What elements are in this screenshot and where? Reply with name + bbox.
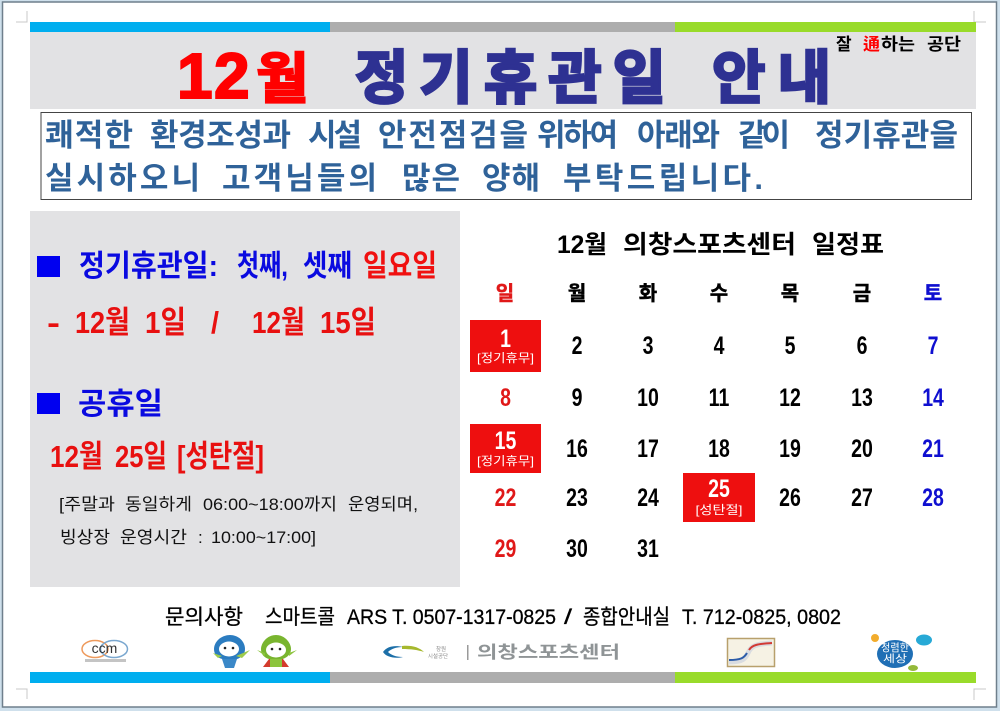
- week 5 dates: 31: [637, 535, 659, 563]
- notice line 1: 환경조성과: [150, 118, 291, 153]
- logo: blue city badge: [871, 634, 932, 671]
- holiday: 25: [성탄절]: [696, 503, 742, 517]
- notice box: [41, 112, 972, 200]
- holiday note line 2: 운영시간: [120, 528, 187, 547]
- notice line 2: 많은: [402, 161, 460, 196]
- week 2 dates: 11: [709, 384, 729, 412]
- regular closure heading: [79, 250, 437, 283]
- week 3 dates: 21: [922, 435, 944, 463]
- contact line: /: [564, 606, 572, 629]
- week 3 dates: 16: [566, 435, 588, 463]
- holiday: 25: 25: [708, 475, 730, 503]
- notice line 1: 정기휴관을: [815, 118, 958, 153]
- holiday: 25: [683, 473, 755, 522]
- contact line: [165, 606, 841, 629]
- notice line 2: 양해: [482, 161, 540, 196]
- weekday header: 화: [639, 282, 657, 305]
- title text main: [355, 46, 831, 111]
- week 3 dates: [566, 435, 944, 463]
- regular closure dates: 12월: [75, 305, 130, 340]
- logo: corporation swoosh: 창원: [436, 645, 446, 653]
- week 1 dates: 3: [643, 332, 653, 360]
- week 1 dates: 6: [857, 332, 867, 360]
- closed day: 1: 1: [500, 325, 511, 353]
- week 2 dates: 13: [851, 384, 873, 412]
- logo: venue name: 의창스포츠센터: [477, 643, 620, 662]
- logo: ccm: [82, 640, 128, 662]
- week 4 dates: 28: [922, 484, 944, 512]
- holiday note line 1: [주말과: [59, 495, 115, 514]
- icon: blue mascot: [213, 635, 250, 668]
- slogan: 하는: [881, 35, 915, 54]
- icon: green mascot: [257, 635, 297, 667]
- holiday date: [50, 439, 264, 474]
- week 4 dates: 26: [779, 484, 801, 512]
- weekday header: 일: [496, 282, 514, 305]
- holiday note line 1: [59, 495, 418, 514]
- regular closure heading: 첫째,: [237, 250, 288, 283]
- week 3 dates: 17: [637, 435, 659, 463]
- weekday header: 금: [853, 283, 871, 305]
- calendar title: 의창스포츠센터: [623, 231, 796, 259]
- notice line 2: 고객님들의: [222, 161, 377, 196]
- contact line: T. 712-0825, 0802: [682, 606, 841, 629]
- title: month: 월: [256, 48, 309, 110]
- closed day: 1: [정기휴무]: [477, 351, 534, 365]
- logo: certificate stamp: [728, 638, 774, 666]
- regular closure heading: 셋째: [303, 250, 352, 283]
- week 4 dates: 23: [566, 484, 588, 512]
- weekday header: 목: [781, 283, 799, 305]
- calendar title: [557, 231, 884, 259]
- holiday date: 25일: [115, 439, 167, 474]
- week 2 dates: 14: [922, 384, 944, 412]
- week 3 dates: 20: [851, 435, 873, 463]
- week 2 dates: 12: [779, 384, 801, 412]
- weekday header: [496, 282, 942, 305]
- slogan: 잘: [836, 35, 852, 54]
- week 1 dates: 4: [714, 332, 725, 360]
- logo: corporation swoosh: 시설공단: [428, 652, 448, 660]
- week 4 dates: 22: [495, 484, 516, 512]
- bottom colour bar: [30, 672, 976, 683]
- week 5 dates: 30: [566, 535, 588, 563]
- slogan: [836, 35, 961, 54]
- week 2 dates: [500, 384, 944, 412]
- bullet: public holiday: [37, 393, 60, 414]
- logo: corporation swoosh: [383, 643, 620, 662]
- week 4 dates: 27: [851, 484, 873, 512]
- calendar title: 일정표: [812, 231, 884, 259]
- week 5 dates: 29: [495, 535, 516, 563]
- regular closure dates: -: [47, 305, 60, 340]
- regular closure dates: [47, 305, 376, 340]
- notice line 2: 실시하오니: [45, 161, 200, 196]
- week 1 dates: 5: [785, 332, 795, 360]
- notice line 1: 안전점검을: [378, 118, 528, 153]
- notice line 1: 아래와: [637, 118, 720, 153]
- week 3 dates: 19: [779, 435, 801, 463]
- contact line: ARS T. 0507-1317-0825: [347, 606, 556, 629]
- calendar: [470, 231, 944, 563]
- panel: closure info: [30, 211, 460, 587]
- title text main: 정기휴관일: [355, 46, 666, 111]
- week 4 dates: 24: [637, 484, 659, 512]
- public holiday heading: 공휴일: [78, 388, 163, 421]
- regular closure heading: 일요일: [363, 250, 437, 283]
- notice line 2: 부탁드립니다.: [563, 161, 763, 196]
- top colour bar: [30, 22, 976, 32]
- calendar title: 12월: [557, 231, 607, 259]
- week 2 dates: 9: [572, 384, 582, 412]
- title: month: [177, 40, 309, 112]
- week 3 dates: 18: [708, 435, 730, 463]
- holiday note line 2: 빙상장: [60, 528, 110, 547]
- notice line 1: 시설: [308, 118, 362, 153]
- holiday note line 1: 동일하게: [125, 495, 192, 514]
- notice line 1: 쾌적한: [45, 118, 133, 153]
- week 2 dates: 10: [637, 384, 659, 412]
- week 1 dates: 7: [928, 332, 938, 360]
- notice line 1: 같이: [738, 118, 790, 153]
- regular closure heading: 정기휴관일:: [79, 250, 218, 283]
- notice line 1: [45, 118, 958, 153]
- title: month: 1: [177, 40, 213, 112]
- notice line 2: [45, 161, 763, 196]
- holiday note line 1: 운영되며,: [348, 495, 418, 514]
- closed day: 15: 15: [495, 427, 516, 455]
- weekday header: 월: [568, 282, 586, 305]
- holiday date: [성탄절]: [177, 439, 264, 474]
- slogan: 공단: [927, 35, 961, 54]
- holiday note line 1: 06:00~18:00까지: [203, 495, 337, 514]
- closed day: 15: [정기휴무]: [477, 454, 534, 468]
- week 1 dates: 2: [572, 332, 582, 360]
- holiday note line 2: :: [198, 528, 203, 547]
- bullet: regular closure: [37, 256, 60, 277]
- holiday note line 2: 10:00~17:00]: [211, 528, 316, 547]
- week 2 dates: 8: [500, 384, 511, 412]
- title: month: 2: [214, 40, 250, 112]
- contact line: 스마트콜: [265, 606, 335, 629]
- week 1 dates: [572, 332, 938, 360]
- week 5 dates: [495, 535, 659, 563]
- contact line: 종합안내실: [583, 606, 670, 629]
- slogan: 通: [863, 35, 880, 54]
- holiday note line 2: [60, 528, 316, 547]
- holiday date: 12월: [50, 439, 103, 474]
- regular closure dates: 12월: [252, 305, 305, 340]
- logo: blue city badge: 청렴한: [881, 641, 909, 654]
- closed day: 1: [470, 320, 541, 372]
- regular closure dates: /: [211, 305, 219, 340]
- logo: ccm: ccm: [92, 640, 117, 656]
- logo: blue city badge: 세상: [883, 653, 907, 665]
- regular closure dates: 1일: [145, 305, 186, 340]
- regular closure dates: 15일: [320, 305, 376, 340]
- closed day: 15: [470, 424, 541, 473]
- week 4 dates: [495, 484, 944, 512]
- contact line: 문의사항: [165, 606, 243, 629]
- weekday header: 수: [710, 282, 728, 305]
- notice line 1: 위하여: [537, 118, 618, 153]
- weekday header: 토: [924, 283, 942, 305]
- title text main: 안내: [712, 46, 831, 111]
- title banner: [30, 32, 976, 109]
